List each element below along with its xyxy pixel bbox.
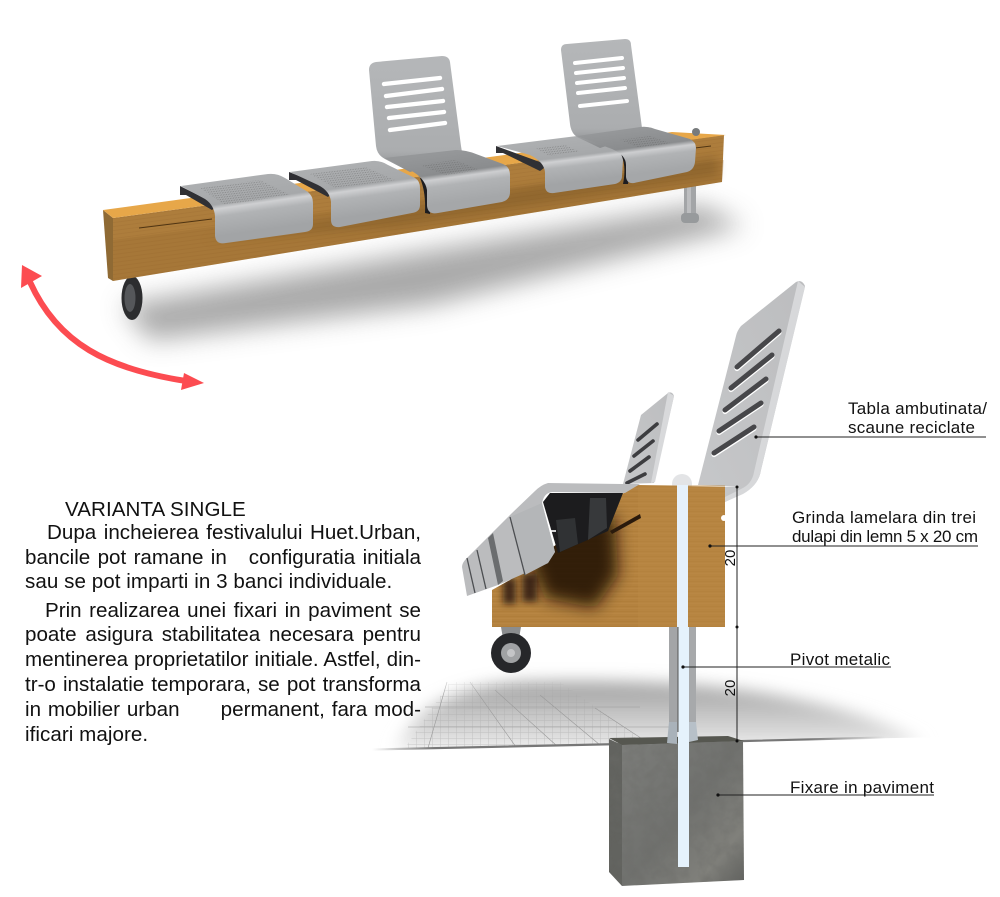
perspective bench illustration [103,39,745,340]
callout: perforated sheet seats [754,399,987,439]
callout: pavement fixing: Fixare in paviment [790,778,934,797]
callout: metal pivot [681,650,891,669]
caster wheel [122,276,142,320]
callout: pavement fixing [716,778,934,797]
perforation patch [200,180,290,205]
height dimension line [722,486,739,742]
seat 1 [180,174,313,243]
seat layered edges [467,517,525,593]
perforation patch [420,160,480,175]
front backrest slots [714,333,779,455]
pivot top cap [672,474,692,494]
perforation patch [620,136,670,148]
rear support leg [681,182,699,223]
seat 3 with backrest [369,56,510,214]
seat 4 [496,136,623,193]
description text block: sau se pot imparti in 3 banci individuale. [25,570,392,593]
pivot base bracket [667,722,698,744]
rear seat backrest [623,392,674,484]
seat slot [610,514,641,534]
callout: perforated sheet seats: scaune reciclate [848,418,975,437]
bench ground shadow [122,205,745,340]
description text block: VARIANTA SINGLE [65,498,246,521]
metal pivot sleeves [669,627,696,732]
callout: laminated beam: dulapi din lemn 5 x 20 cm [792,527,978,546]
red double-headed rotation arrow [21,265,204,390]
concrete speckle texture [704,780,744,882]
backrest slots [384,78,445,130]
timber beam [103,128,726,281]
seat cast shadow on timber [503,515,618,608]
seat underside interior [543,493,623,553]
paving grid [405,682,670,748]
concrete foundation block [605,735,750,890]
metal pivot bar [677,485,689,867]
description text block: mentinerea proprietatilor initiale. Astfel, din- [25,648,421,671]
description text block: ificari majore. [25,723,148,746]
laminated timber beam section [492,485,727,627]
description text block: Prin realizarea unei fixari in paviment se [45,599,421,622]
dimension upper: 20 [722,550,739,566]
dimension lower: 20 [722,680,739,696]
seat 2 [289,161,420,227]
seat gap [488,533,503,585]
description text block: tr-o instalatie temporara, se pot transforma [25,673,421,696]
backrest slots [575,58,627,106]
front seat backrest [698,281,805,502]
beam notch [721,515,727,521]
description text block: poate asigura stabilitatea necesara pentru [25,623,421,646]
seat section bent profile [462,483,640,596]
callout: laminated beam [708,508,978,548]
perforation patch [535,145,580,156]
rear backrest slots [627,424,657,483]
callout: metal pivot: Pivot metalic [790,650,890,669]
section view: paved ground plane [395,681,925,752]
description text block: in mobilier urban permanent, fara mod- [25,698,421,721]
callout: perforated sheet seats: Tabla ambutinata/ [848,399,987,418]
section caster wheel [491,627,531,673]
description text block: Dupa incheierea festivalului Huet.Urban, [47,521,421,544]
description text block [25,498,421,746]
callout: laminated beam: Grinda lamelara din trei [792,508,976,527]
perforation patch [310,167,395,188]
seat 5 with backrest [561,39,696,184]
ground line [372,738,885,750]
description text block: bancile pot ramane in configuratia initiala [25,546,421,569]
